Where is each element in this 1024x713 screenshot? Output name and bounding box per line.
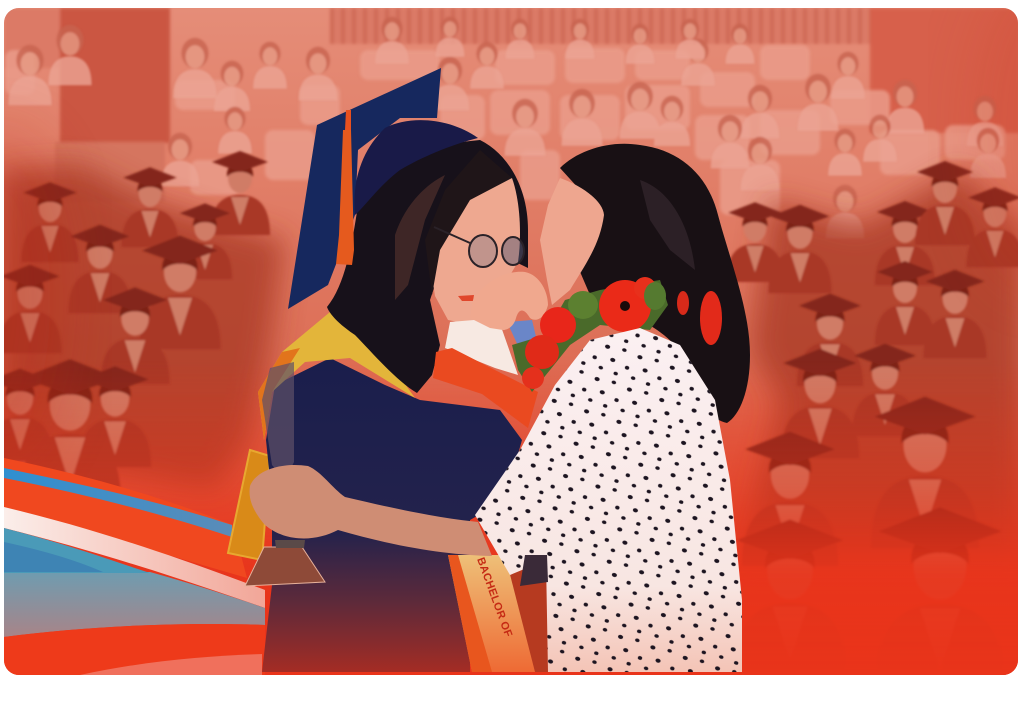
graduate bbox=[228, 68, 548, 672]
swoosh: white band bbox=[4, 507, 265, 608]
swoosh: teal and deep blue wedges bbox=[4, 528, 150, 573]
glasses bbox=[434, 227, 524, 267]
lips bbox=[458, 295, 474, 301]
glass trophy bbox=[245, 362, 325, 586]
flower on hair bbox=[677, 291, 722, 345]
graduation stole with text: BACHELOR OF bbox=[474, 556, 514, 639]
mother bbox=[245, 144, 750, 672]
blue gap between figures bbox=[507, 320, 538, 350]
white blouse with dots bbox=[475, 328, 742, 672]
hair highlight bbox=[640, 180, 695, 270]
orange sleeve band bbox=[433, 348, 538, 428]
gold sash over shoulders bbox=[258, 312, 415, 440]
mortarboard bbox=[288, 68, 441, 309]
seats rows bbox=[5, 45, 1005, 215]
gown skirt right of sash bbox=[510, 570, 548, 672]
hand at face bbox=[470, 272, 548, 330]
gold diploma frame bbox=[228, 450, 270, 560]
spectators in upper rows bbox=[8, 17, 1006, 238]
graduation stole with text bbox=[448, 555, 535, 672]
mother's arm and hand bbox=[250, 465, 492, 556]
hair bbox=[327, 140, 528, 393]
mortarboard skull cap bbox=[354, 120, 478, 215]
mother's hair bbox=[560, 144, 750, 423]
mother's face bbox=[540, 178, 604, 305]
dark mass of seated graduates bbox=[0, 165, 1024, 560]
hair strands over face bbox=[425, 150, 512, 295]
swoosh: upper orange band bbox=[4, 458, 247, 578]
gown bbox=[262, 358, 522, 672]
swoosh: lower red band bbox=[4, 624, 264, 637]
white cuff bbox=[445, 318, 518, 375]
dark object at waist bbox=[520, 555, 548, 586]
swoosh: blue stripe bbox=[4, 468, 232, 537]
curtain and wall behind audience bbox=[4, 8, 1020, 202]
face bbox=[428, 178, 520, 325]
hair highlight bbox=[395, 175, 445, 300]
swoosh: blue grey panel bbox=[4, 572, 265, 637]
tassel bbox=[336, 110, 354, 265]
decorative swoosh: red, blue and white bands bbox=[4, 458, 265, 675]
graduates seated left and right bbox=[0, 151, 1023, 692]
flower lei bbox=[512, 277, 668, 392]
